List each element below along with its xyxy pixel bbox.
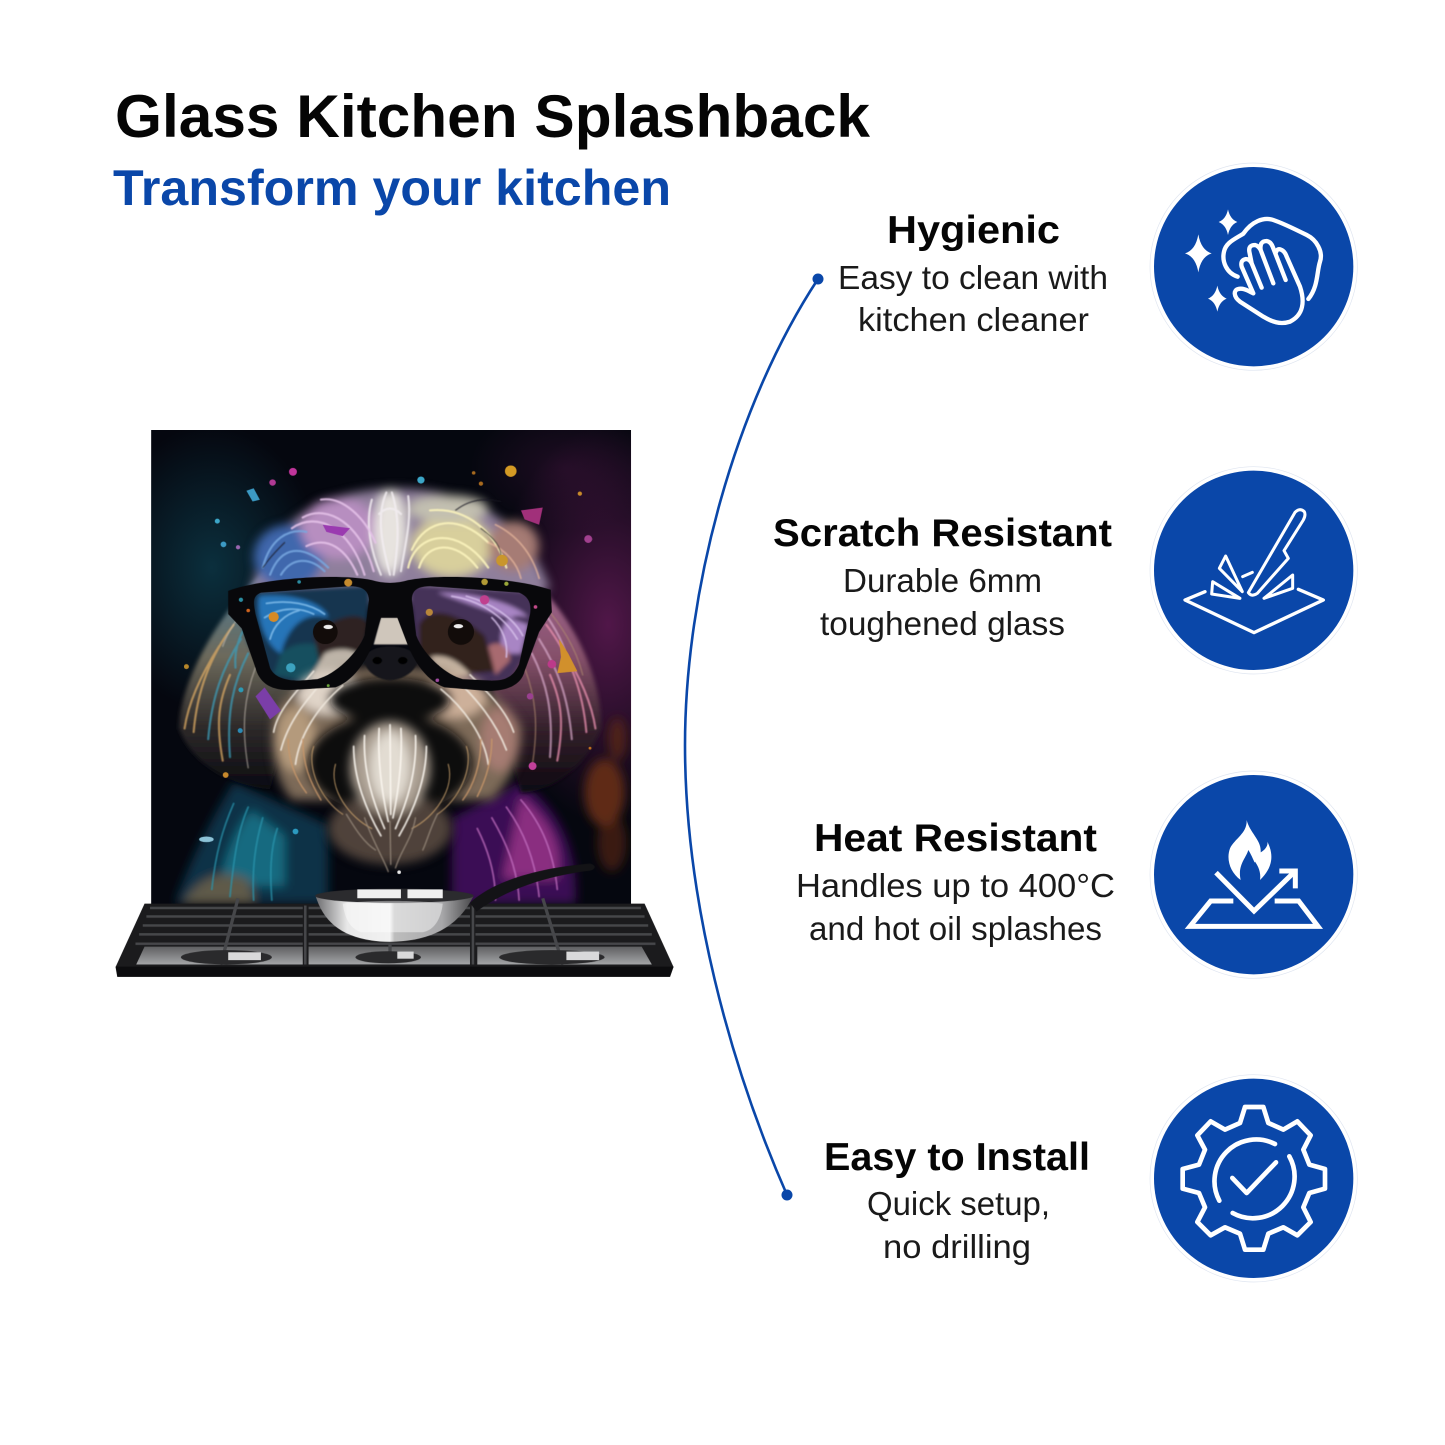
splashback panel: dog with glasses xyxy=(151,430,632,904)
feature text: easy to install: no drilling xyxy=(883,1228,1031,1265)
ears xyxy=(179,568,601,793)
icon: knife scratching surface xyxy=(1150,467,1357,674)
top of head fur xyxy=(250,489,550,603)
beard and cheek strokes xyxy=(274,671,514,871)
feature text: heat resistant: Handles up to 400°C xyxy=(796,867,1115,904)
feature text: hygienic: Easy to clean with xyxy=(838,259,1108,296)
burners xyxy=(181,950,605,964)
product image: splashback above gas hob xyxy=(116,430,674,977)
feature text: scratch resistant: Durable 6mm xyxy=(843,562,1042,599)
feature text: scratch resistant xyxy=(773,512,1112,642)
gas hob xyxy=(115,898,674,977)
body fur xyxy=(212,800,557,900)
body xyxy=(175,782,576,904)
burner plates xyxy=(136,947,652,964)
lens interiors xyxy=(235,585,545,686)
feature text: easy to install: Quick setup, xyxy=(867,1185,1050,1222)
feature text: hygienic: Hygienic xyxy=(887,209,1060,252)
eyes xyxy=(313,619,474,645)
feature text: scratch resistant: toughened glass xyxy=(820,605,1065,642)
feature text: heat resistant xyxy=(796,817,1115,947)
lens fur xyxy=(265,596,523,657)
icon: flame over heat-resistant surface xyxy=(1150,771,1357,978)
feature text: hygienic xyxy=(838,209,1108,338)
frying pan xyxy=(315,864,595,942)
beard xyxy=(328,721,452,864)
hob front edge xyxy=(115,967,674,977)
ear fur xyxy=(182,613,598,769)
snout bridge xyxy=(374,618,410,644)
rust speckle xyxy=(585,718,626,871)
grates xyxy=(135,898,655,964)
glasses splatter xyxy=(239,579,537,687)
feature text: heat resistant: and hot oil splashes xyxy=(809,910,1102,947)
icon: hand wiping with sparkles xyxy=(1150,163,1357,370)
nose xyxy=(364,646,417,680)
subtitle: Transform your kitchen xyxy=(113,160,671,216)
dark chin surround xyxy=(308,678,472,814)
feature text: heat resistant: Heat Resistant xyxy=(814,817,1097,860)
connector curve with end dots xyxy=(685,274,824,1200)
head fur strokes xyxy=(263,493,539,578)
muzzle and cheeks xyxy=(272,667,521,800)
title: Glass Kitchen Splashback xyxy=(115,83,871,150)
icon: gear with check mark xyxy=(1150,1075,1357,1282)
feature text: hygienic: kitchen cleaner xyxy=(858,301,1089,338)
feature text: easy to install xyxy=(824,1136,1090,1265)
paint splashes xyxy=(184,465,592,874)
feature text: easy to install: Easy to Install xyxy=(824,1136,1090,1179)
glasses frame xyxy=(228,577,552,691)
feature text: scratch resistant: Scratch Resistant xyxy=(773,512,1112,555)
